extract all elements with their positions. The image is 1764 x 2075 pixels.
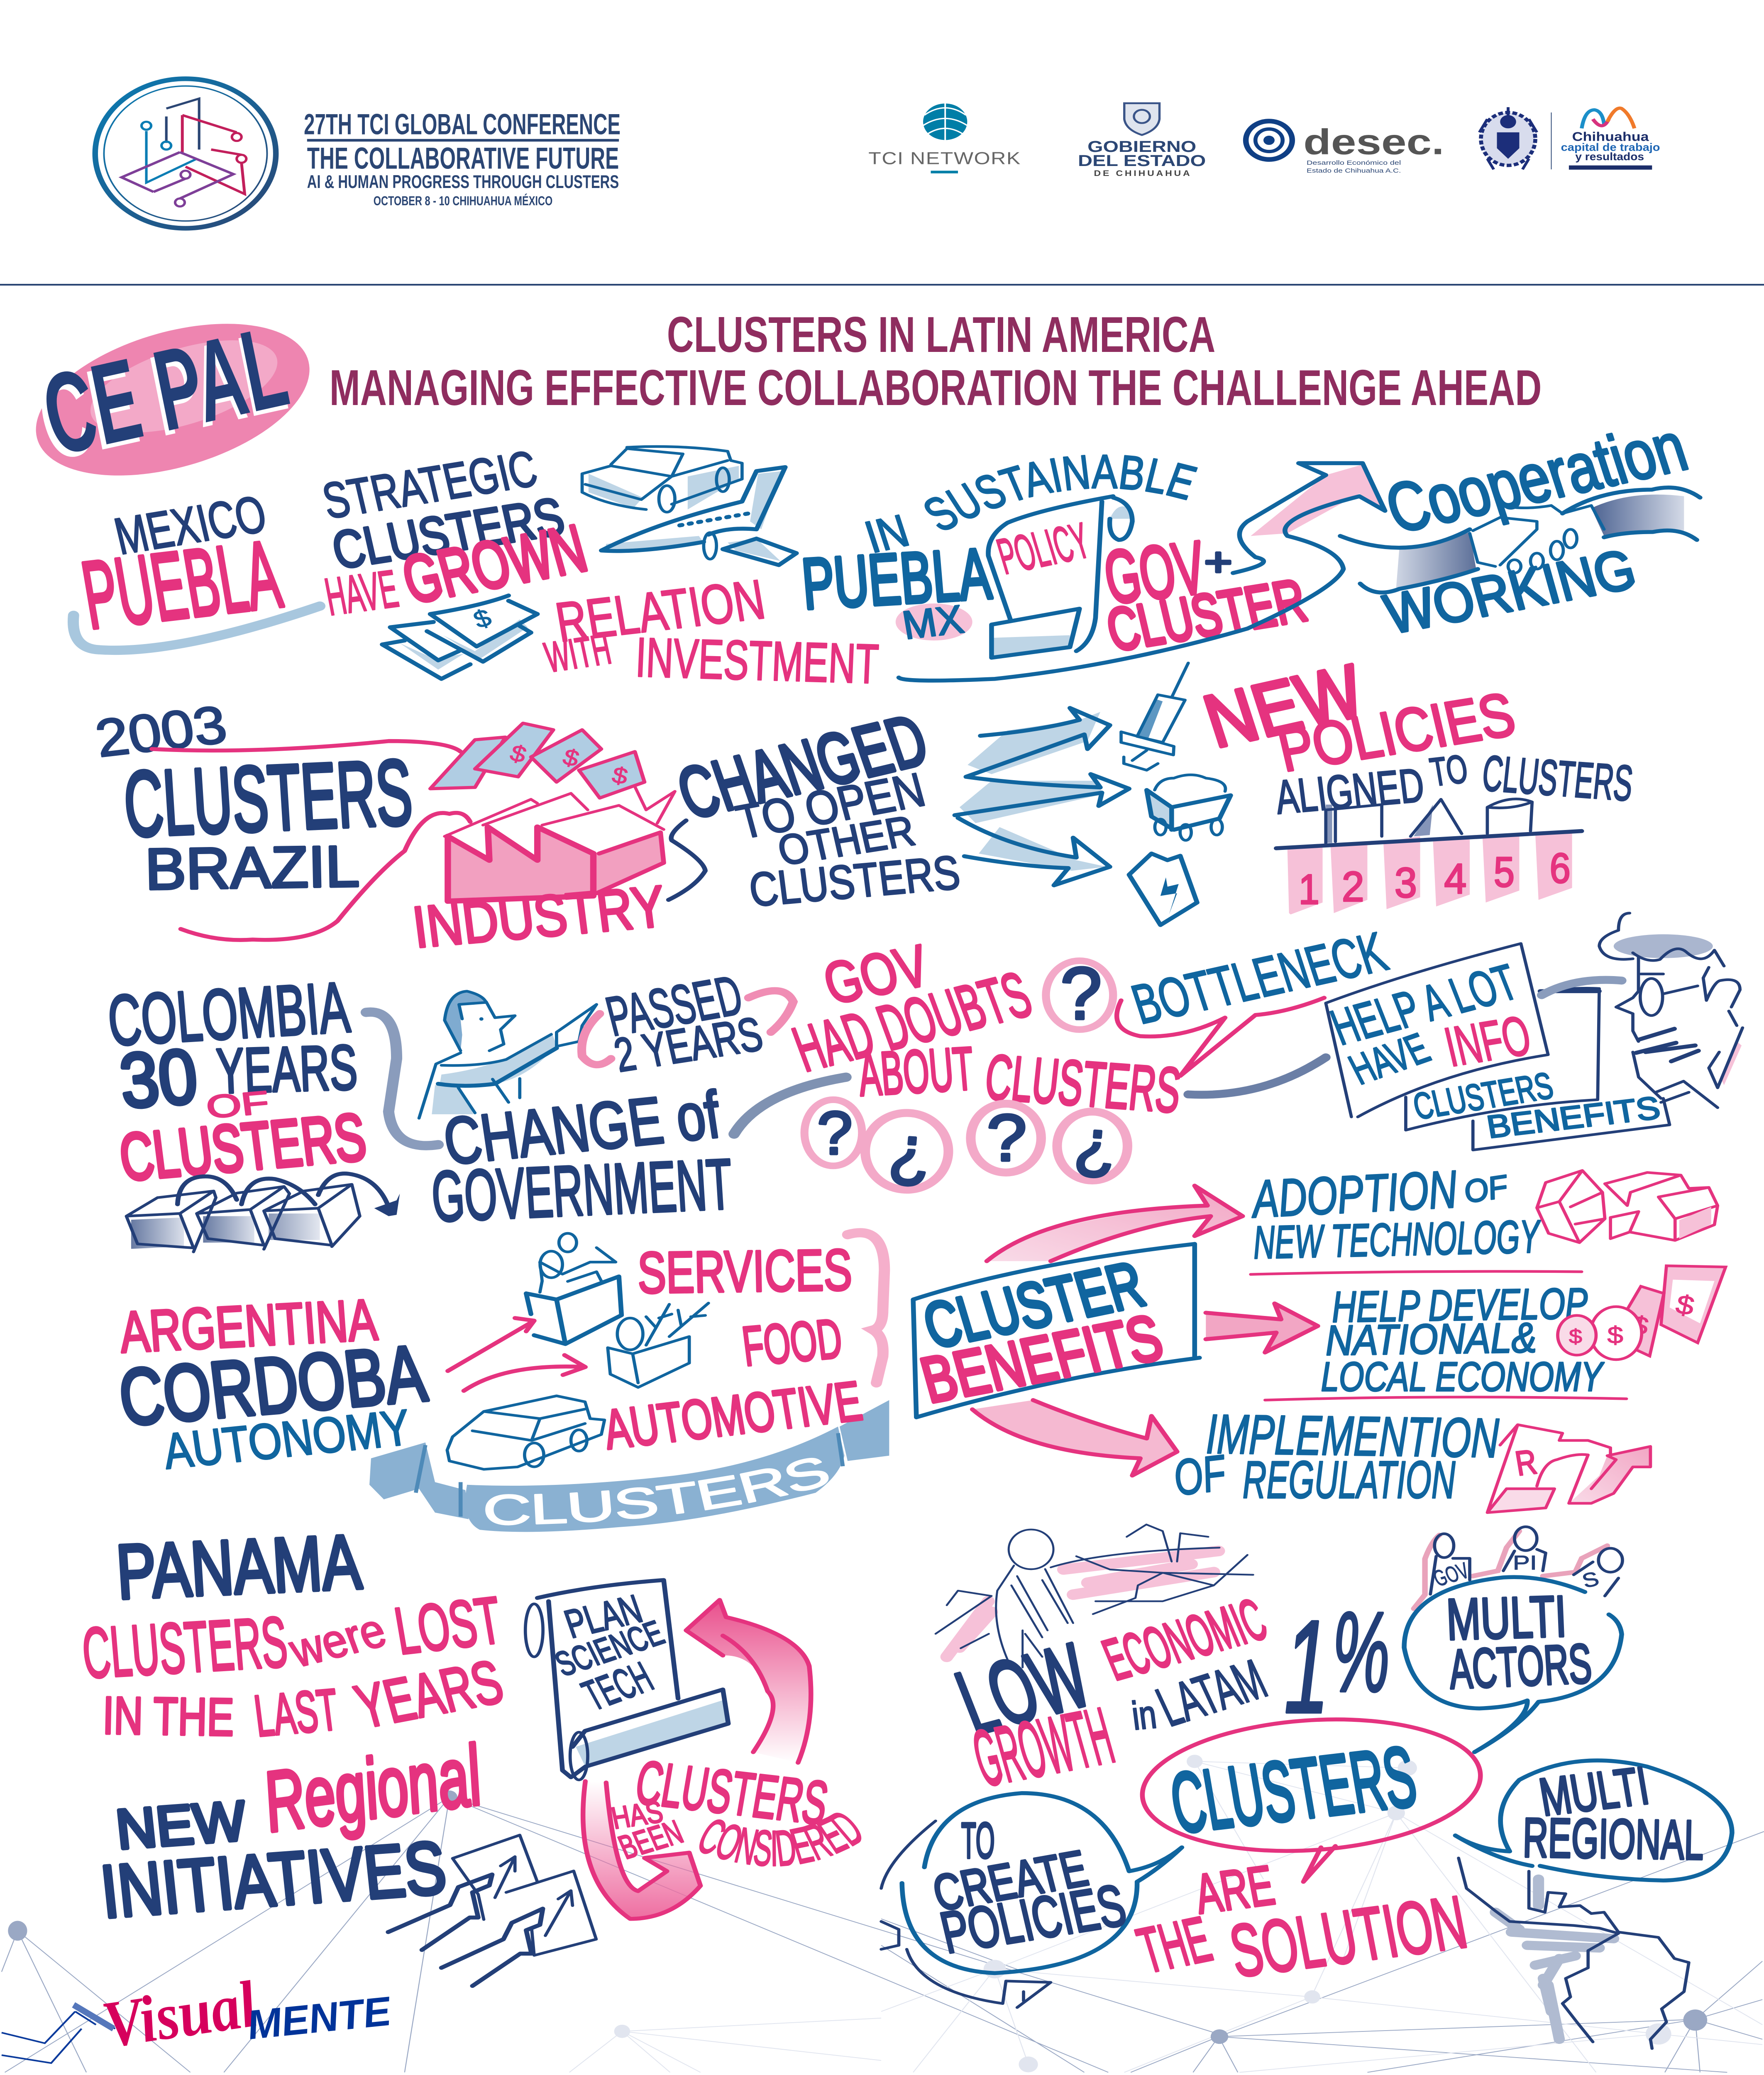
callout: multi regional bubble — [1455, 1756, 1732, 1880]
text: HELP DEVELOP: HELP DEVELOP — [1332, 1279, 1588, 1331]
panel: Colombia: ABOUT — [856, 1035, 976, 1109]
icon: money and coins — [1558, 1266, 1726, 1360]
text: LOW: LOW — [943, 1625, 1103, 1753]
icon: mine cart — [1147, 775, 1231, 840]
text: PANAMA: PANAMA — [114, 1519, 364, 1615]
header divider line — [0, 284, 1764, 286]
text: AUTONOMY: AUTONOMY — [160, 1399, 414, 1479]
text: 2 YEARS: 2 YEARS — [609, 1007, 767, 1082]
text: IN THE: IN THE — [102, 1686, 235, 1747]
number: 1%: 1 — [1284, 1593, 1329, 1741]
connector: navy curve — [669, 820, 705, 900]
text: HAS: HAS — [608, 1794, 666, 1836]
panel: sustainable policy — [799, 408, 1700, 681]
text: LOST: LOST — [390, 1583, 507, 1668]
heading: session title: CLUSTERS IN LATIN AMERICA — [667, 307, 1215, 363]
text: HAVE: HAVE — [1341, 1024, 1437, 1094]
connector: grey curve to doubts — [734, 1077, 846, 1134]
connector: grey curve — [366, 1012, 438, 1146]
panel: Latam low growth — [881, 1524, 1732, 2048]
text: NEW: NEW — [113, 1790, 249, 1860]
text: CLUSTER: CLUSTER — [1101, 566, 1312, 664]
icon: man on cracked ground — [936, 1524, 1253, 1668]
icon: Chihuahua capital logo: y resultados — [1575, 150, 1644, 162]
badge: CEPAL — [9, 294, 336, 505]
icon: airplane — [601, 467, 796, 565]
text: ALIGNED: ALIGNED — [1273, 758, 1427, 824]
panel: Mexico Puebla: PUEBLA — [75, 520, 288, 649]
heading: session title — [330, 307, 1542, 416]
text: conference title block: OCTOBER 8 - 10 CHIHUAHUA MÉXICO — [374, 193, 552, 208]
icon: TCI Network logo: TCI NETWORK — [868, 149, 1021, 168]
chart: six numbered pink columns on shelf: 2 — [1342, 863, 1364, 910]
text: YEARS: YEARS — [215, 1031, 359, 1106]
text: FOOD: FOOD — [739, 1308, 845, 1378]
text: BOTTLENECK: BOTTLENECK — [1125, 921, 1394, 1036]
text: LATAM: LATAM — [1148, 1648, 1276, 1738]
arrow: pink U-turn arrow — [583, 1781, 701, 1919]
text: plus sign: + — [1204, 540, 1232, 584]
panel: Latam low growth: GROWTH — [964, 1691, 1122, 1803]
icon: plan scroll — [525, 1580, 728, 1780]
divider line between logos — [1551, 112, 1552, 169]
text: BEEN: BEEN — [613, 1813, 688, 1866]
panel: Latam low growth: ECONOMIC — [1094, 1587, 1275, 1692]
panel: cluster benefits box — [913, 1244, 1200, 1417]
callout: pink speech line — [1117, 998, 1324, 1076]
callout: create policies bubble — [902, 1793, 1182, 1973]
icon: thinking person at laptop — [1542, 913, 1742, 1108]
text: POLICIES: POLICIES — [1272, 680, 1521, 784]
panel: cluster benefits — [913, 1160, 1726, 1513]
icon: pointing person — [419, 991, 596, 1118]
icon: desec logo — [1246, 121, 1444, 174]
panel: conference header — [95, 79, 1660, 228]
panel: sustainable policy: POLICY — [991, 512, 1096, 585]
text: CLUSTERS: CLUSTERS — [631, 1748, 833, 1838]
panel: Colombia — [105, 913, 1742, 1252]
icon: desec logo: Desarrollo Económico del — [1307, 159, 1401, 166]
icon: four question marks in circles — [804, 1099, 1127, 1190]
icon: municipal crest — [1479, 107, 1537, 169]
logo: Visual Mente — [2, 1967, 395, 2063]
icon: arms holding bubble — [881, 1821, 1051, 2007]
logo: Visual Mente: Visual — [96, 1967, 263, 2062]
callout: clusters bubble: CLUSTERS — [1164, 1729, 1422, 1850]
text: MULTI: MULTI — [1445, 1583, 1568, 1652]
arrow: swoosh to cooperation — [899, 463, 1385, 681]
text: CORDOBA: CORDOBA — [115, 1328, 431, 1442]
text: INVESTMENT: INVESTMENT — [634, 627, 880, 695]
text: 30: 30 — [116, 1033, 201, 1124]
icon: battery — [1129, 854, 1197, 925]
panel: Colombia: GOVERNMENT — [429, 1144, 735, 1237]
callout: create policies bubble: TO — [961, 1813, 995, 1869]
callout: multi actors bubble — [1404, 1577, 1622, 1752]
icon: Chihuahua capital logo: capital de trabajo — [1561, 141, 1660, 153]
text: YEARS: YEARS — [348, 1648, 510, 1741]
text: CLUSTERS on ribbon: CLUSTERS — [482, 1447, 836, 1533]
text: PUEBLA: PUEBLA — [799, 534, 994, 624]
text: SERVICES: SERVICES — [637, 1237, 853, 1305]
bracket: pink brackets around passed 2 years — [582, 991, 793, 1065]
icon: regulation document and arrow — [1487, 1425, 1650, 1513]
chart: six numbered pink columns on shelf: 6 — [1550, 845, 1571, 892]
chart: six numbered pink columns on shelf: 4 — [1444, 855, 1466, 902]
icon: Gobierno del Estado logo — [1078, 103, 1206, 178]
chart: six numbered pink columns on shelf — [1276, 799, 1582, 914]
text: SOLUTION: SOLUTION — [1224, 1880, 1473, 1992]
icon: service desk — [526, 1233, 621, 1344]
panel: Colombia: CLUSTERS — [982, 1041, 1184, 1126]
text: TO OPEN: TO OPEN — [731, 763, 931, 849]
text: INITIATIVES: INITIATIVES — [97, 1826, 450, 1933]
text: conference title block: THE COLLABORATIVE FUTURE — [307, 142, 619, 176]
icon: presentation boards — [1326, 944, 1670, 1150]
icon: three boxes with jumping arrows — [126, 1174, 400, 1252]
icon: money and coins: $ — [1628, 1311, 1651, 1340]
connector: pink line to money — [152, 741, 461, 752]
text: TECH: TECH — [574, 1653, 661, 1719]
text: ACTORS: ACTORS — [1447, 1633, 1593, 1701]
panel: Brazil clusters — [91, 649, 1635, 960]
text: THE: THE — [1130, 1903, 1219, 1986]
text: BENEFITS: BENEFITS — [914, 1301, 1170, 1416]
text: PLAN: PLAN — [559, 1587, 647, 1647]
text: were: were — [282, 1603, 393, 1677]
icon: four question marks in circles: ¿ — [887, 1111, 934, 1189]
text: GOV: GOV — [1099, 526, 1211, 619]
icon: conference logo — [95, 79, 276, 228]
panel: Mexico Puebla: HAVE — [320, 559, 403, 626]
text: WORKING: WORKING — [1378, 538, 1642, 646]
connector: grey curve to board — [1188, 1057, 1326, 1095]
text: LOCAL ECONOMY: LOCAL ECONOMY — [1321, 1354, 1605, 1400]
icon: Gobierno del Estado logo: GOBIERNO — [1087, 138, 1196, 155]
text: CHANGED: CHANGED — [668, 700, 937, 834]
icon: money and coins: $ — [1569, 1326, 1582, 1348]
text: INDUSTRY: INDUSTRY — [409, 873, 669, 960]
connector: pink curve to factory — [181, 813, 470, 940]
divider: pink rule — [1265, 1397, 1627, 1400]
text: HAD DOUBTS: HAD DOUBTS — [784, 958, 1040, 1085]
text: OF: OF — [1170, 1445, 1231, 1506]
text: INFO: INFO — [1439, 1004, 1537, 1078]
text: STRATEGIC: STRATEGIC — [318, 440, 542, 530]
panel: Brazil clusters: CLUSTERS — [121, 740, 415, 856]
logo: Visual Mente: MENTE — [244, 1988, 395, 2048]
badge: CEPAL: CE PAL — [21, 308, 301, 484]
icon: money and coins: $ — [1673, 1289, 1697, 1321]
icon: three actors: PI — [1513, 1552, 1537, 1574]
text: IN: IN — [859, 505, 915, 563]
panel: Mexico Puebla — [73, 440, 880, 695]
icon: TCI Network logo — [868, 103, 1021, 173]
text: CLUSTER: CLUSTER — [916, 1248, 1152, 1362]
text: RELATION: RELATION — [551, 569, 769, 654]
text: AUTOMOTIVE: AUTOMOTIVE — [599, 1370, 866, 1461]
icon: Gobierno del Estado logo: DEL ESTADO — [1078, 152, 1206, 169]
icon: hands holding papers with up arrows — [388, 1835, 596, 1986]
text: CREATE: CREATE — [927, 1840, 1093, 1921]
icon: technology gems and boxes — [1537, 1170, 1718, 1243]
icon: desec logo: Estado de Chihuahua A.C. — [1307, 168, 1401, 174]
text: CLUSTERS: CLUSTERS — [116, 1100, 370, 1194]
arrow: pink curved arrow up — [686, 1600, 811, 1763]
icon: Chihuahua capital logo: Chihuahua — [1572, 130, 1649, 144]
panel: Latam low growth: % — [1332, 1589, 1390, 1716]
badge: CEPAL: CE PAL — [25, 303, 303, 479]
arrows: three branches — [955, 708, 1129, 885]
text: in: in — [1129, 1692, 1159, 1738]
panel: Argentina Cordoba — [115, 1233, 889, 1533]
text: conference title block: 27TH TCI GLOBAL CONFERENCE — [304, 108, 621, 141]
text: ADOPTION OF: ADOPTION — [1248, 1160, 1459, 1229]
icon: Chihuahua capital logo — [1561, 108, 1660, 170]
text: COLOMBIA: COLOMBIA — [105, 967, 352, 1061]
icon: four question marks in circles: ? — [987, 1101, 1027, 1175]
icon: car — [447, 1396, 604, 1469]
text: OTHER: OTHER — [774, 807, 919, 874]
icon: money and coins: $ — [1607, 1322, 1623, 1348]
text: BRAZIL: BRAZIL — [144, 833, 360, 902]
text: ADOPTION OF: OF — [1461, 1168, 1512, 1210]
panel: Panama: LAST — [251, 1677, 342, 1748]
text: POLICIES: POLICIES — [935, 1872, 1132, 1965]
divider: pink rule — [1251, 1272, 1582, 1274]
icon: map of Latin America — [1459, 1858, 1689, 2048]
text: conference title block — [304, 108, 621, 208]
icon: handshake — [1340, 488, 1700, 593]
icon: banknotes: $ — [507, 740, 530, 767]
text: 2003: 2003 — [91, 694, 231, 768]
text: MULTI: MULTI — [1535, 1756, 1653, 1827]
icon: three actors — [1414, 1527, 1622, 1609]
chart: six numbered pink columns on shelf: 3 — [1395, 859, 1417, 906]
text: PASSED: PASSED — [600, 964, 748, 1048]
text: BENEFITS: BENEFITS — [1484, 1089, 1663, 1145]
panel: Panama: CLUSTERS — [79, 1602, 290, 1693]
icon: factory — [445, 787, 675, 903]
banner: clusters ribbon — [369, 1400, 889, 1532]
text: Regional: Regional — [256, 1727, 490, 1849]
icon: four question marks in circles: ? — [817, 1099, 853, 1167]
icon: Gobierno del Estado logo: DE CHIHUAHUA — [1094, 169, 1190, 178]
badge: MX: MX — [899, 597, 967, 648]
chart: six numbered pink columns on shelf: 5 — [1494, 849, 1515, 896]
text: REGULATION: REGULATION — [1243, 1450, 1456, 1509]
underline swoosh — [73, 606, 320, 650]
icon: three actors: GOV — [1429, 1558, 1473, 1591]
text: MEXICO: MEXICO — [109, 485, 272, 566]
text: SUSTAINABLE: SUSTAINABLE — [913, 445, 1203, 542]
text: TO: TO — [1427, 747, 1471, 795]
text: CLUSTERS: CLUSTERS — [327, 486, 569, 580]
icon: car — [582, 447, 742, 512]
text: OF: OF — [204, 1084, 271, 1125]
text: NEW: NEW — [1195, 649, 1373, 763]
icon: food box — [608, 1303, 709, 1387]
text: CLUSTERS: CLUSTERS — [1409, 1064, 1557, 1127]
icon: four question marks in circles: ¿ — [1072, 1105, 1119, 1181]
icon: banknotes — [430, 723, 645, 798]
text: GROWN: GROWN — [395, 511, 594, 617]
icon: money stack: $ — [469, 604, 496, 634]
callout: pink bubble tail — [1303, 1846, 1335, 1882]
icon: banknotes: $ — [610, 762, 630, 789]
text: CONSIDERED: CONSIDERED — [689, 1800, 875, 1877]
icon: money stack — [382, 596, 538, 679]
callout: clusters bubble — [1136, 1709, 1487, 1862]
arrows: three pink benefit arrows — [972, 1186, 1318, 1475]
icon: banknotes: $ — [560, 744, 582, 771]
background network of nodes and lines — [2, 1755, 1764, 2073]
text: conference title block: AI & HUMAN PROGRESS THROUGH CLUSTERS — [307, 171, 619, 192]
text: IMPLEMENTION: IMPLEMENTION — [1206, 1403, 1500, 1469]
arrows: pink arrows to sectors — [448, 1318, 585, 1391]
text: GOV: GOV — [816, 933, 936, 1016]
text: ARE: ARE — [1190, 1854, 1279, 1925]
text: NATIONAL &: NATIONAL& — [1325, 1314, 1537, 1364]
icon: three actors: S — [1579, 1567, 1602, 1592]
icon: desec logo: desec. — [1303, 122, 1444, 162]
bracket: pink brace — [848, 1233, 884, 1383]
text: CHANGE of: CHANGE of — [439, 1078, 725, 1179]
icon: question mark circle: ? — [1060, 952, 1102, 1035]
chart: six numbered pink columns on shelf: 1 — [1299, 866, 1319, 913]
icon: policy scroll — [988, 496, 1132, 658]
text: ARGENTINA: ARGENTINA — [117, 1287, 379, 1365]
text: CLUSTERS: CLUSTERS — [746, 845, 963, 917]
icon: syringe — [1121, 663, 1188, 770]
text: SCIENCE: SCIENCE — [549, 1614, 670, 1684]
icon: regulation document and arrow: R — [1512, 1443, 1539, 1483]
panel: Panama — [79, 1519, 875, 1986]
text: WITH: WITH — [540, 625, 615, 681]
text: HELP A LOT: HELP A LOT — [1323, 954, 1525, 1056]
